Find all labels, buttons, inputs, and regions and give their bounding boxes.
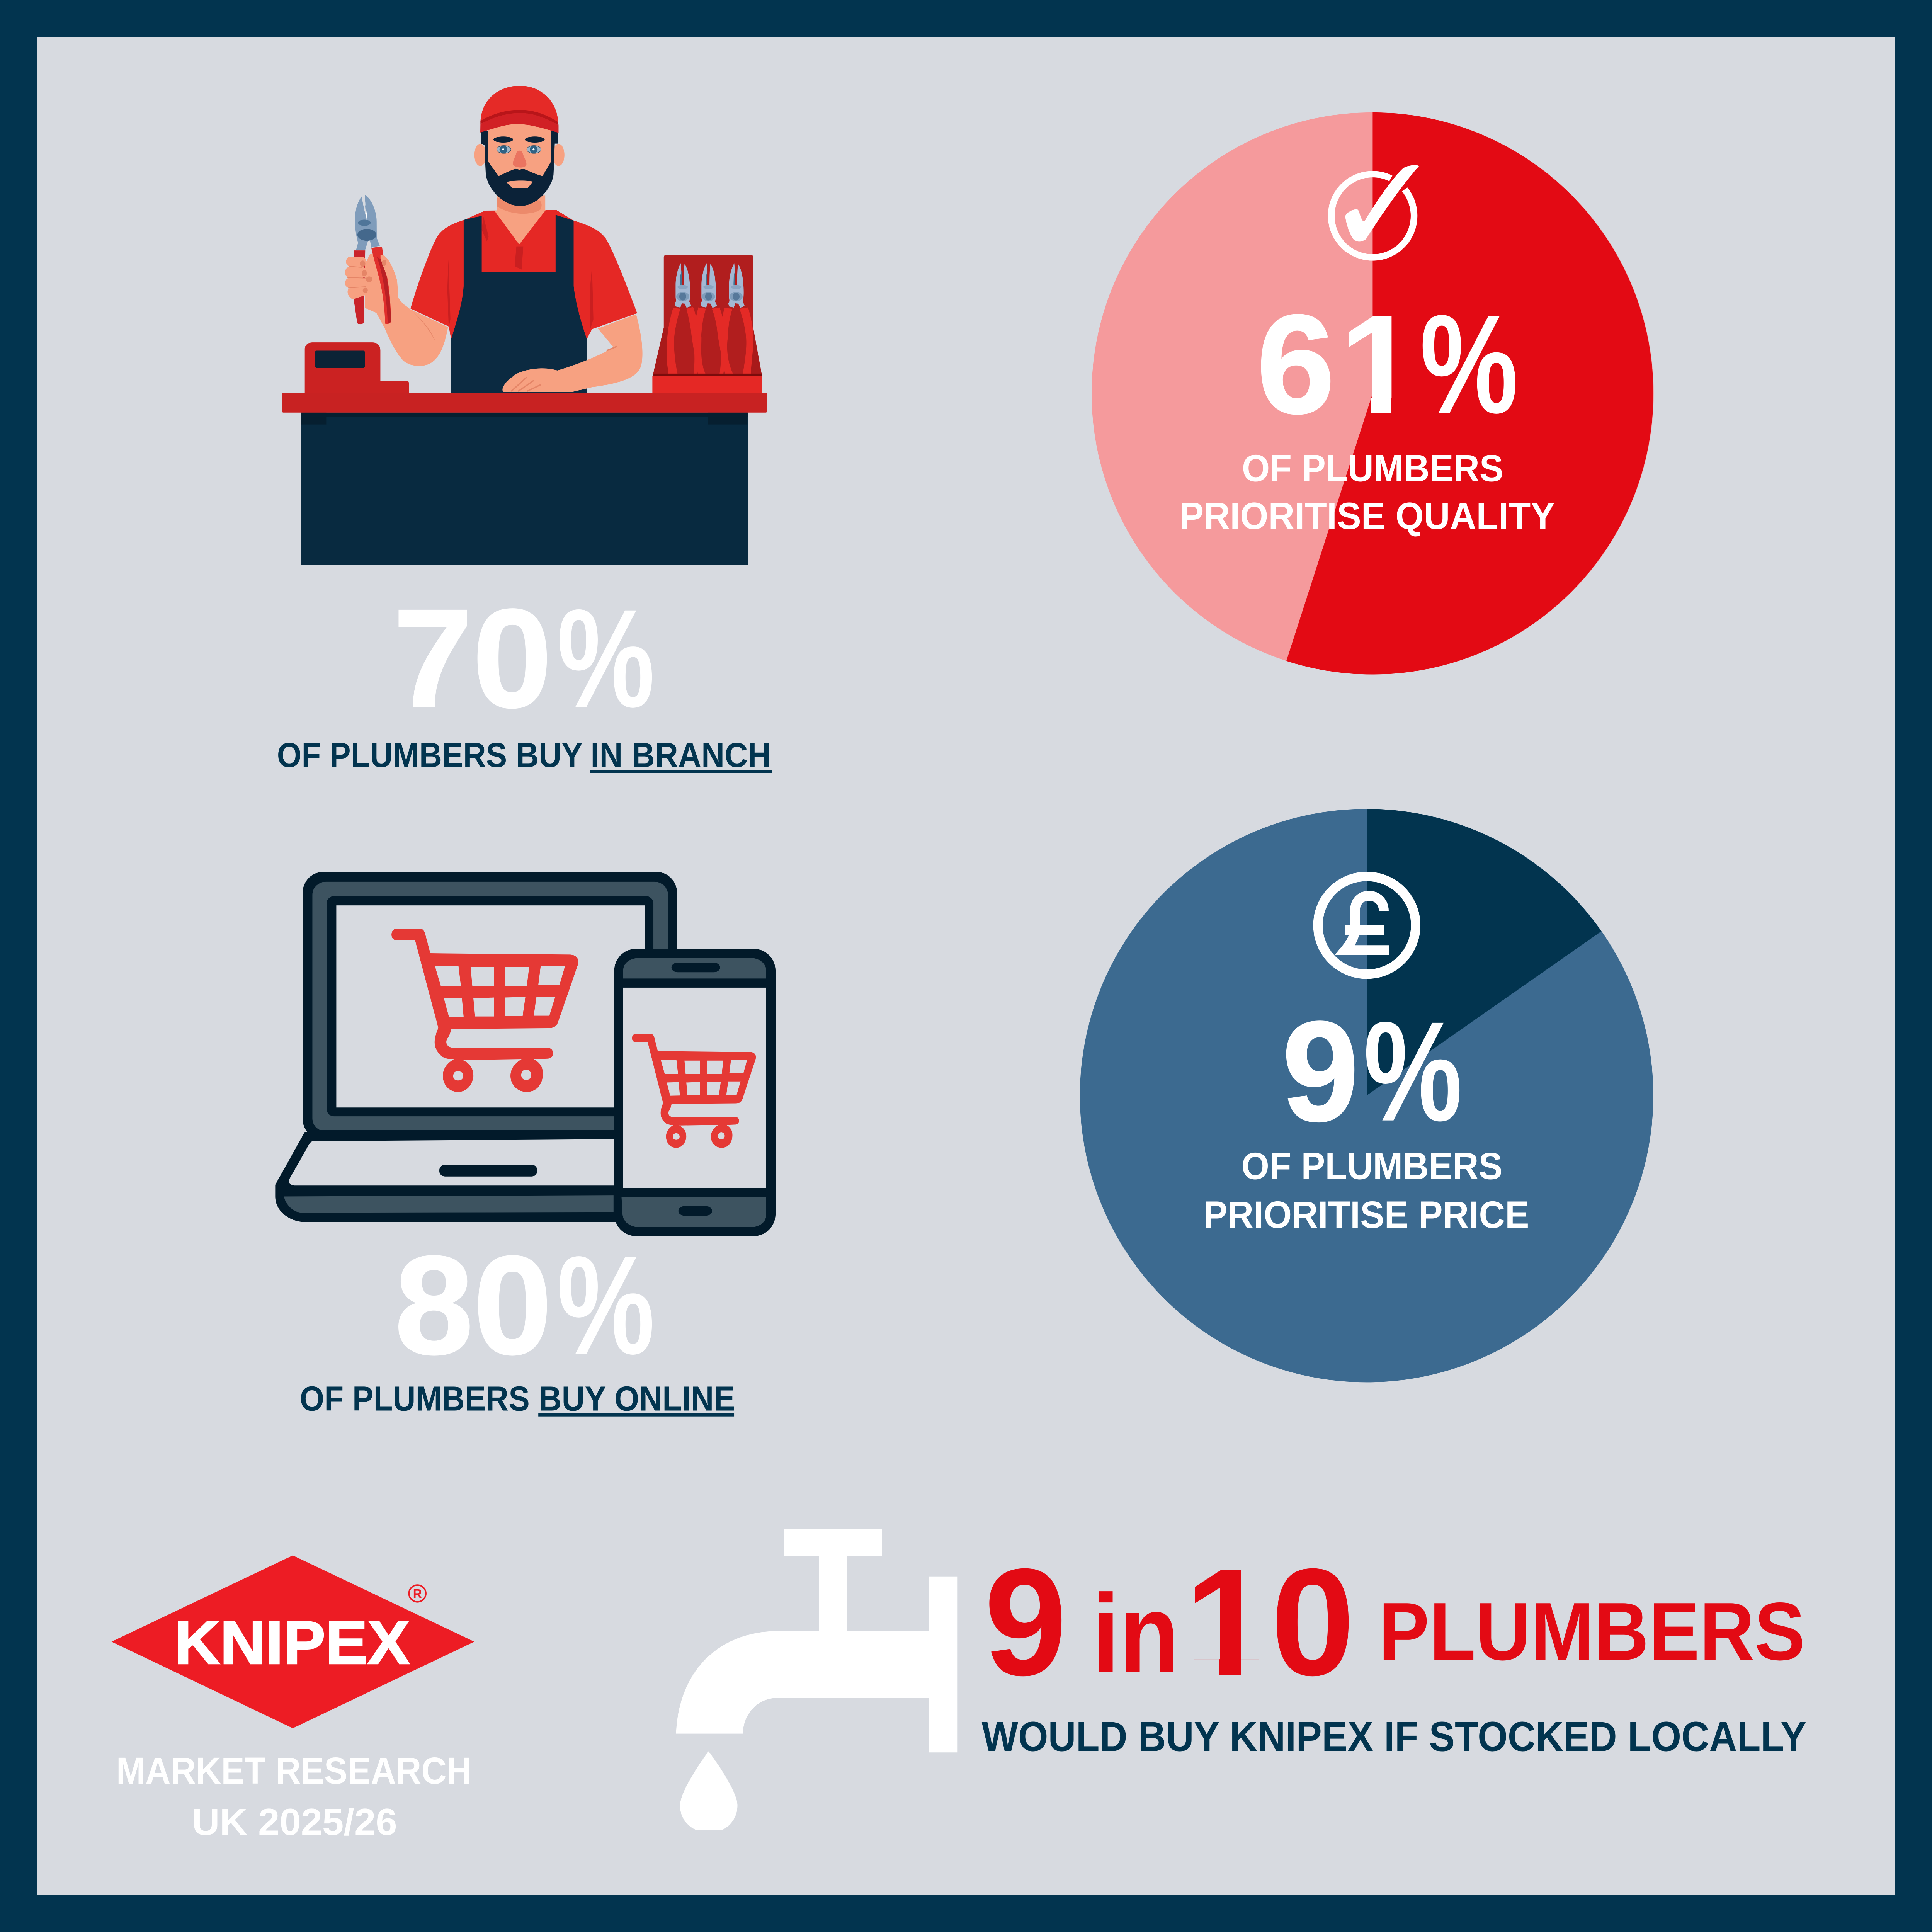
9 percent number: [1282, 992, 1463, 1151]
label: of plumbers prioritise price: OF PLUMBERS: [1242, 1145, 1502, 1187]
icon: phone shopping cart: [632, 1034, 756, 1148]
callout: 9 in 10 plumbers: [981, 1568, 1806, 1751]
headline: 9 in 10 plumbers: PLUMBERS: [1379, 1586, 1805, 1677]
61 percent number: 6: [1257, 286, 1335, 443]
cash register: [305, 342, 409, 393]
label: of plumbers prioritise quality: PRIORITISE QUALITY: [1180, 495, 1555, 537]
9 percent number: 9: [1282, 992, 1359, 1151]
panel: online shopping devices illustration: [275, 872, 776, 1236]
plumber raised arm holding pliers: [345, 195, 448, 366]
plumber head with cap and beard: [474, 86, 565, 245]
subline: would buy knipex if stocked locally: WOULD BUY KNIPEX IF STOCKED LOCALLY: [982, 1714, 1806, 1760]
panel: pie chart price 9 percent: [1080, 809, 1653, 1382]
KNIPEX logo diamond: R: [413, 1587, 422, 1600]
plumber torso with apron: [411, 210, 643, 393]
61 percent number: [1261, 314, 1515, 415]
market research label: MARKET RESEARCH: [116, 1750, 472, 1792]
panel: KNIPEX logo and market research label: [112, 1555, 474, 1843]
70 percent number: [393, 580, 655, 736]
caption: of plumbers buy in branch: IN BRANCH: [590, 736, 771, 774]
9 percent number: %: [1364, 992, 1463, 1151]
label: of plumbers prioritise price: [1203, 1145, 1529, 1236]
label: of plumbers prioritise quality: [1180, 447, 1555, 537]
label: of plumbers prioritise quality: OF PLUMBERS: [1242, 447, 1503, 489]
headline: 9 in 10 plumbers: 1: [1184, 1537, 1269, 1707]
caption: of plumbers buy online: OF PLUMBERS: [300, 1379, 530, 1418]
counter and desk: [282, 393, 767, 565]
pie chart: [1092, 112, 1654, 674]
pie chart: [1080, 809, 1653, 1382]
icon: check mark in circle: [1331, 165, 1419, 257]
80 percent number: 80: [395, 1227, 552, 1383]
caption: of plumbers buy online: [300, 1379, 735, 1418]
70 percent number: %: [557, 580, 655, 736]
label: of plumbers prioritise price: PRIORITISE PRICE: [1203, 1193, 1529, 1236]
pliers display box: [652, 255, 762, 393]
icon: laptop shopping cart: [391, 929, 578, 1092]
headline: 9 in 10 plumbers: in: [1092, 1571, 1179, 1696]
headline: 9 in 10 plumbers: 0: [1271, 1537, 1355, 1707]
80 percent number: [395, 1227, 655, 1383]
laptop: [275, 872, 677, 1222]
icon: dripping tap: [676, 1529, 957, 1830]
caption: of plumbers buy in branch: OF PLUMBERS BUY: [277, 736, 583, 774]
panel: pie chart quality 61 percent: [1092, 112, 1654, 674]
61 percent number: %: [1420, 286, 1518, 443]
caption: of plumbers buy online: BUY ONLINE: [539, 1379, 735, 1418]
stat: 70 percent in branch: [277, 580, 772, 774]
market research label: [116, 1750, 472, 1843]
caption: of plumbers buy in branch: [277, 736, 772, 774]
phone: [614, 949, 776, 1236]
70 percent number: 70: [393, 580, 552, 736]
stat: 80 percent online: [300, 1227, 735, 1418]
KNIPEX logo diamond: [112, 1555, 474, 1728]
80 percent number: %: [557, 1227, 655, 1383]
panel: in-branch plumber illustration: [282, 86, 767, 565]
KNIPEX logo diamond: KNIPEX: [174, 1609, 410, 1677]
61 percent number: 1: [1340, 286, 1418, 443]
icon: pound sign in circle: [1318, 876, 1416, 974]
headline: 9 in 10 plumbers: 9: [984, 1537, 1067, 1707]
market research label: UK 2025/26: [192, 1801, 397, 1843]
headline: 9 in 10 plumbers: [989, 1568, 1802, 1676]
